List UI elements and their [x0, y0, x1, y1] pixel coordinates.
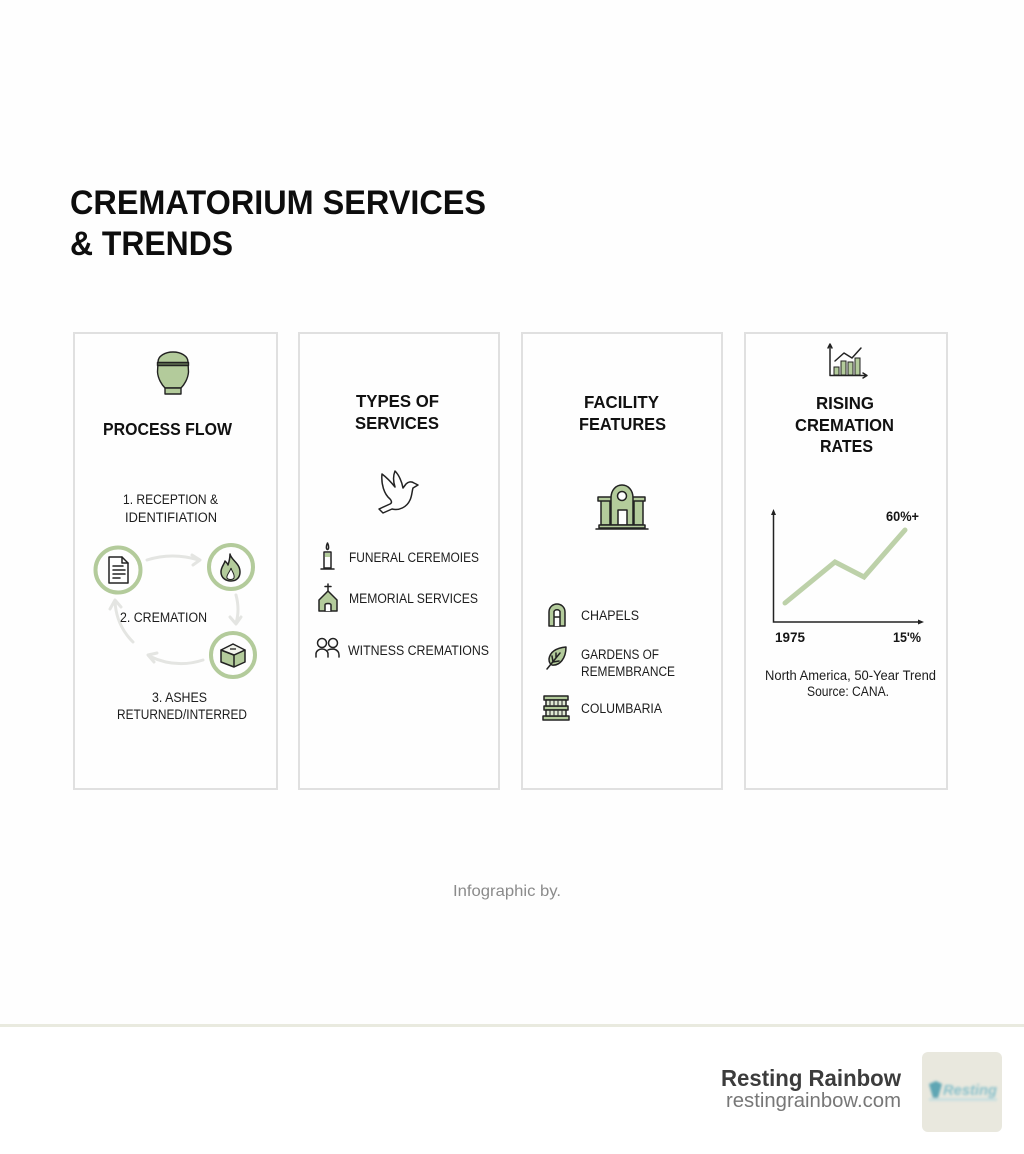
item: gardens of remembrance	[547, 647, 675, 679]
heading: rising cremation rates: RATES	[820, 436, 873, 456]
arrow: step 2 to 3	[230, 595, 241, 624]
item: funeral ceremonies	[321, 543, 479, 569]
heading: rising cremation rates	[795, 393, 894, 456]
title	[70, 184, 486, 263]
icon: dove	[379, 471, 418, 513]
item: columbaria	[543, 696, 662, 720]
panel: types of services	[299, 333, 499, 789]
step 1 label	[123, 492, 218, 525]
line chart	[771, 508, 924, 645]
credit line: Infographic by.	[453, 883, 561, 900]
heading: facility features	[579, 392, 666, 434]
arrow: step 1 to 2	[147, 555, 200, 565]
item: witness cremations: WITNESS CREMATIONS	[348, 643, 489, 658]
brand name: Resting Rainbow	[721, 1065, 902, 1091]
icon: bar chart with trend	[828, 344, 867, 378]
panel: process flow	[74, 333, 277, 789]
heading: facility features: FACILITY	[584, 392, 659, 412]
item: gardens of remembrance: GARDENS OF	[581, 647, 659, 662]
icon: church	[319, 584, 337, 611]
item: gardens of remembrance: REMEMBRANCE	[581, 664, 675, 679]
item: witness cremations	[316, 638, 489, 658]
title: & TRENDS	[70, 225, 233, 263]
step 3 label: 3. ASHES	[152, 690, 207, 705]
heading: types of services: SERVICES	[355, 413, 439, 433]
icon: candle	[321, 543, 334, 569]
icon: box in ring	[211, 633, 255, 677]
panel: rising cremation rates	[745, 333, 947, 789]
logo	[922, 1052, 1002, 1132]
step 3 label	[117, 690, 247, 722]
icon: urn	[158, 352, 188, 394]
brand url: restingrainbow.com	[726, 1089, 901, 1112]
heading: types of services: TYPES OF	[356, 391, 439, 411]
data label: 60%+: 60%+	[886, 508, 919, 524]
heading: facility features: FEATURES	[579, 414, 666, 434]
logo: Resting	[943, 1082, 997, 1099]
chart caption	[765, 668, 936, 699]
axis label: 1975: 1975	[775, 629, 805, 645]
arrow: step 3 to 1	[148, 653, 203, 664]
icon: document in ring	[96, 548, 140, 592]
title: CREMATORIUM SERVICES	[70, 184, 486, 222]
icon: building	[596, 485, 648, 529]
item: columbaria: COLUMBARIA	[581, 701, 662, 716]
icon: chapel	[549, 604, 565, 626]
heading: process flow: PROCESS FLOW	[103, 419, 232, 439]
heading: types of services	[355, 391, 439, 433]
item: chapels: CHAPELS	[581, 608, 639, 623]
item: chapels	[549, 604, 639, 626]
chart caption: Source: CANA.	[807, 684, 889, 699]
step 1 label: IDENTIFIATION	[125, 510, 217, 525]
axis label: 15'%: 15'%	[893, 629, 921, 645]
item: memorial services: MEMORIAL SERVICES	[349, 591, 478, 606]
panel: facility features	[522, 333, 722, 789]
step 3 label: RETURNED/INTERRED	[117, 707, 247, 722]
item: memorial services	[319, 584, 478, 611]
footer	[0, 1024, 1024, 1154]
item: funeral ceremonies: FUNERAL CEREMOIES	[349, 550, 479, 565]
icon: flame in ring	[209, 545, 253, 589]
icon: leaf	[547, 647, 566, 669]
heading: rising cremation rates: CREMATION	[795, 415, 894, 435]
step 1 label: 1. RECEPTION &	[123, 492, 218, 507]
step 2 label: 2. CREMATION	[120, 610, 207, 625]
icon: columbarium	[543, 696, 569, 720]
arrow: return to start	[110, 600, 133, 642]
chart caption: North America, 50-Year Trend	[765, 668, 936, 683]
heading: rising cremation rates: RISING	[816, 393, 874, 413]
icon: people	[316, 638, 339, 657]
